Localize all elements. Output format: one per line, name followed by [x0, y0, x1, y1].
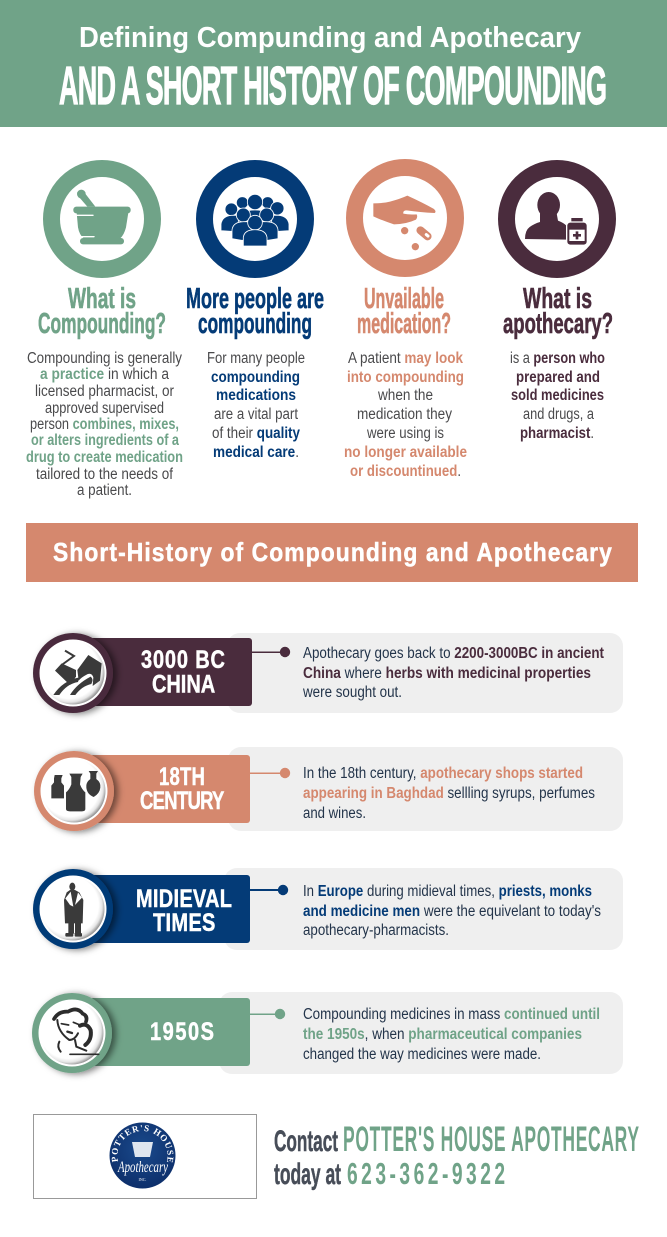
text block: a patient. — [77, 482, 132, 499]
description: Apothecary goes back to 2200-3000BC in ancient — [303, 645, 604, 662]
heading: More people are — [186, 283, 324, 315]
description: apothecary-pharmacists. — [303, 922, 449, 939]
title line two: AND A SHORT HISTORY OF COMPOUNDING — [59, 56, 607, 117]
title line one: Defining Compunding and Apothecary — [79, 22, 581, 54]
heading: What is — [68, 283, 136, 315]
panel: what is compounding — [26, 168, 183, 499]
connector — [248, 768, 290, 778]
label bar: 18TH — [159, 762, 205, 791]
description panel — [228, 747, 623, 831]
section heading banner: Short-History of Compounding and Apothecary — [53, 539, 612, 567]
description — [303, 1006, 600, 1063]
description panel — [224, 868, 623, 950]
text block: tailored to the needs of — [36, 466, 174, 483]
description: changed the way medicines were made. — [303, 1046, 541, 1063]
text block: approved supervised — [45, 400, 164, 417]
heading: Compounding? — [38, 308, 166, 340]
label bar: MIDIEVAL — [136, 885, 232, 913]
text block: medication they — [357, 406, 452, 423]
text block: licensed pharmacist, or — [35, 383, 174, 400]
heading — [503, 283, 613, 340]
description — [303, 883, 601, 939]
text block: are a vital part — [214, 406, 299, 423]
text block: were using is — [366, 425, 444, 442]
text block: is a person who — [510, 350, 605, 367]
description: In the 18th century, apothecary shops started — [303, 765, 583, 782]
heading — [38, 283, 166, 340]
text block: prepared and — [516, 369, 600, 386]
contact call to action: POTTER'S HOUSE APOTHECARY — [343, 1119, 639, 1159]
text block: compounding — [211, 369, 300, 386]
timeline item: 1950s — [32, 992, 623, 1074]
label bar — [90, 998, 250, 1066]
text block: or discountinued. — [350, 463, 461, 480]
timeline item: 18th century — [34, 747, 623, 831]
label bar — [90, 638, 252, 706]
label bar: 3000 BC — [141, 646, 225, 674]
text block: Compounding is generally — [27, 350, 182, 367]
contact call to action — [274, 1119, 639, 1191]
description — [302, 645, 604, 701]
contact call to action: 623-362-9322 — [347, 1158, 505, 1191]
description: and wines. — [303, 805, 366, 822]
label bar — [90, 875, 250, 943]
description: In Europe during midieval times, priests, monks — [303, 883, 592, 900]
icon: robed monk — [33, 869, 113, 949]
text block: no longer available — [344, 444, 467, 461]
logo: potter's house apothecary seal — [110, 1122, 176, 1188]
description: China where herbs with medicinal properties — [303, 665, 591, 682]
label bar — [90, 755, 250, 823]
heading — [357, 283, 451, 340]
description: the 1950s, when pharmaceutical companies — [303, 1026, 582, 1043]
description: and medicine men were the equivelant to today's — [303, 903, 601, 920]
text block: of their quality — [212, 425, 300, 442]
contact call to action: Contact — [274, 1125, 338, 1158]
icon: 1950s portrait — [32, 993, 112, 1073]
panel: more people are compounding — [186, 168, 324, 461]
logo: potter's house apothecary seal: Apothecary — [117, 1159, 169, 1176]
connector — [250, 647, 290, 657]
text block: and drugs, a — [523, 406, 594, 423]
text block: pharmacist. — [520, 425, 594, 442]
text block: when the — [377, 387, 433, 404]
heading: What is — [523, 283, 592, 315]
logo: potter's house apothecary seal: POTTER'S HOUSE — [112, 1125, 174, 1162]
connector — [248, 885, 288, 895]
text block: drug to create medication — [26, 449, 183, 466]
heading: Unvailable — [364, 283, 444, 315]
text block — [510, 350, 605, 442]
heading — [186, 283, 324, 340]
text block: For many people — [207, 350, 305, 367]
text block: a practice in which a — [40, 366, 169, 383]
description panel — [227, 633, 623, 713]
description: appearing in Baghdad sellling syrups, perfumes — [303, 785, 595, 802]
description: were sought out. — [302, 684, 402, 701]
logo: potter's house apothecary seal: INC. — [139, 1177, 146, 1182]
section heading banner — [26, 523, 638, 582]
description — [303, 765, 595, 822]
connector — [248, 1009, 285, 1019]
icon: group of people — [204, 168, 306, 270]
text block: or alters ingredients of a — [31, 432, 179, 449]
contact call to action: today at — [274, 1158, 341, 1191]
text block: sold medicines — [511, 387, 604, 404]
description panel — [219, 992, 623, 1074]
text block: medications — [216, 387, 296, 404]
text block — [207, 350, 305, 461]
panel: unvailable medication — [344, 168, 467, 480]
logo box — [33, 1114, 257, 1199]
header banner — [0, 0, 667, 127]
icon: hand dropping pills — [354, 168, 456, 268]
icon: great wall of china — [33, 633, 113, 713]
text block — [344, 350, 467, 480]
text block: A patient may look — [348, 350, 463, 367]
description: Compounding medicines in mass continued until — [303, 1006, 600, 1023]
text block: person combines, mixes, — [30, 416, 179, 433]
icon: person with medicine bottle — [506, 168, 608, 270]
timeline item: 3000 BC China — [33, 633, 623, 713]
heading: medication? — [357, 308, 451, 340]
timeline item: midieval times — [33, 868, 623, 950]
label bar: CHINA — [152, 670, 215, 698]
icon: apothecary bottles — [34, 751, 114, 831]
panel: what is apothecary — [503, 168, 613, 442]
icon: mortar and pestle — [52, 168, 152, 270]
label bar: 1950S — [150, 1018, 214, 1046]
text block: into compounding — [347, 369, 464, 386]
heading: compounding — [198, 308, 312, 340]
label bar: CENTURY — [140, 786, 225, 815]
text block — [26, 350, 183, 499]
text block: medical care. — [213, 444, 299, 461]
label bar: TIMES — [153, 909, 215, 937]
